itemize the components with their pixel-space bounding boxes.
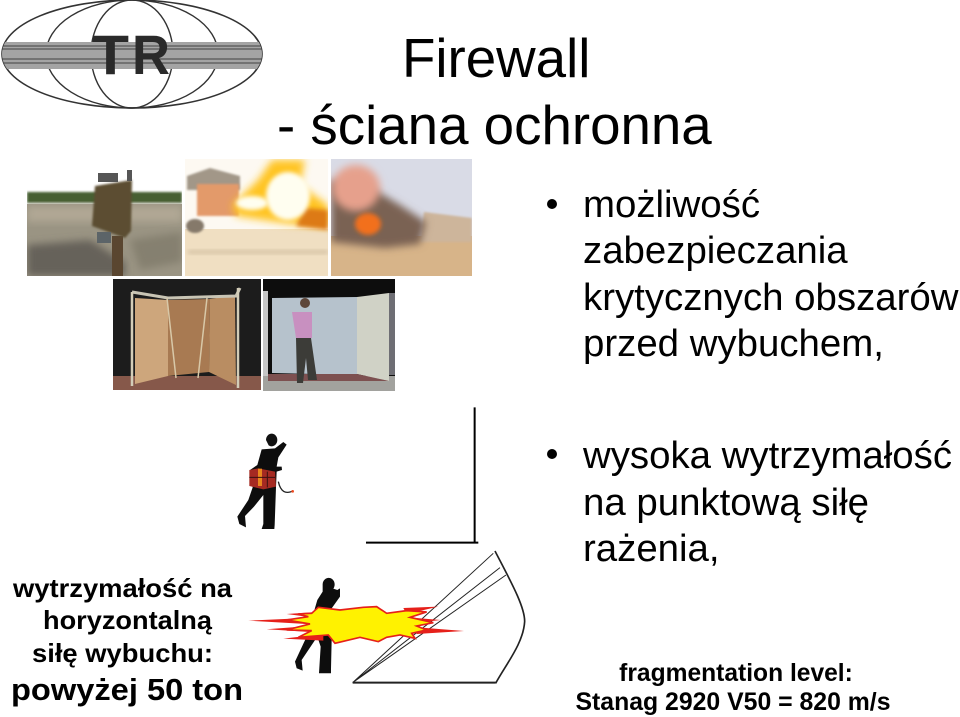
caption: horizontal blast resistance: powyżej 50 ton	[11, 672, 243, 707]
caption: horizontal blast resistance: wytrzymałość na	[12, 573, 233, 603]
photo: explosion smoke cloud	[331, 159, 472, 276]
bullet: protection of critical areas	[547, 183, 959, 365]
icon: attacker with explosives	[237, 434, 294, 529]
photo: tan firewall curtain	[113, 279, 261, 390]
icon: explosion burst	[248, 607, 464, 643]
caption: fragmentation level: Stanag 2920 V50 = 820 m/s	[576, 689, 890, 716]
bullet: protection of critical areas: możliwość	[583, 183, 760, 226]
title	[277, 27, 712, 156]
title: Firewall	[402, 27, 590, 89]
bullet: high resistance: rażenia,	[583, 527, 720, 570]
bullet: high resistance: wysoka wytrzymałość	[582, 434, 952, 477]
photo: man beside white curtain	[263, 279, 395, 391]
caption: horizontal blast resistance: horyzontalną	[43, 605, 213, 635]
wall: curved shield	[353, 551, 525, 683]
bullet: protection of critical areas: krytycznych obszarów	[583, 276, 959, 319]
diagram: attacker approaching straight wall	[237, 407, 478, 543]
caption: horizontal blast resistance: siłę wybuchu:	[32, 638, 213, 668]
logo: TR	[0, 0, 264, 108]
bullet: protection of critical areas: zabezpieczania	[583, 229, 848, 272]
diagram: explosion against curved wall	[248, 551, 525, 683]
logo: TR: T	[92, 23, 129, 86]
bullet: protection of critical areas: przed wybuchem,	[583, 322, 884, 365]
icon: attacker caught in blast	[295, 578, 340, 673]
caption: fragmentation level: fragmentation level:	[619, 660, 853, 687]
photo: test panel on post	[27, 159, 182, 276]
logo: TR: R	[132, 23, 170, 86]
bullet: high resistance: na punktową siłę	[583, 481, 869, 524]
caption: fragmentation level	[576, 660, 890, 716]
caption: horizontal blast resistance	[11, 573, 243, 707]
photo: explosion fireball	[185, 159, 328, 276]
title: - ściana ochronna	[277, 94, 712, 156]
bullet: high resistance	[547, 434, 952, 570]
wall: straight	[366, 407, 478, 543]
